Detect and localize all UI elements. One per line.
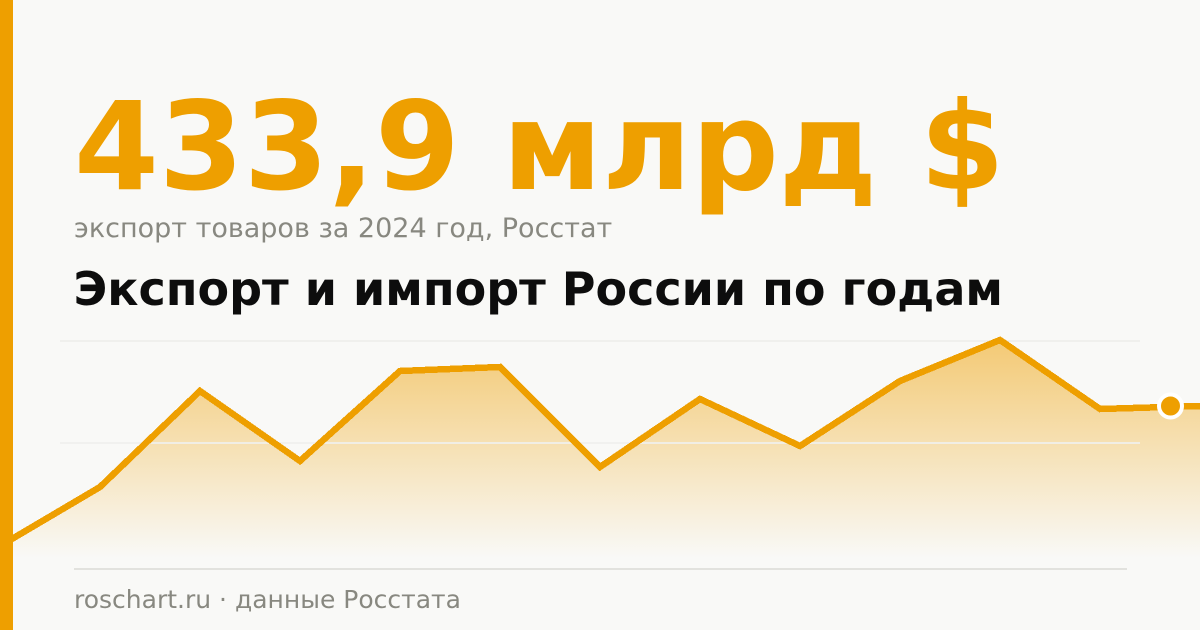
subtitle: экспорт товаров за 2024 год, Росстат	[74, 213, 612, 244]
left accent bar	[0, 0, 13, 630]
last point marker	[1159, 394, 1182, 418]
big number: 433,9 млрд $	[74, 76, 1005, 218]
footer rule	[74, 568, 1127, 570]
footer source: roschart.ru · данные Росстата	[74, 585, 461, 614]
data line	[0, 340, 1200, 546]
heading: Экспорт и импорт России по годам	[74, 262, 1003, 316]
area fill	[0, 340, 1200, 558]
